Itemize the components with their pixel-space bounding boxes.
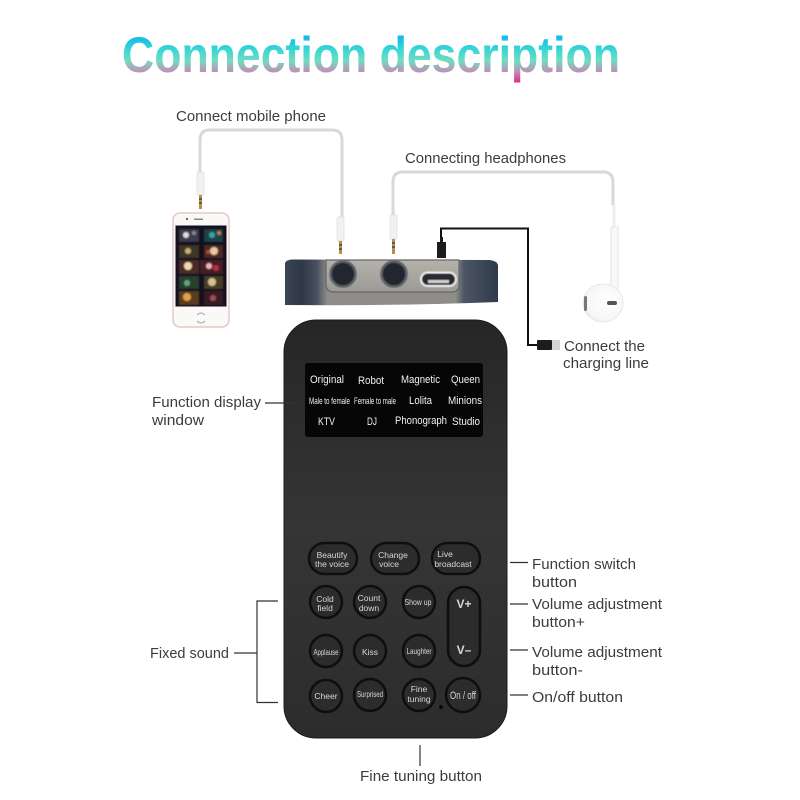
button labels: tuning	[407, 694, 431, 704]
label: function switch button	[510, 556, 636, 591]
button labels: field	[317, 603, 333, 613]
button labels: Fine	[411, 684, 428, 694]
button labels: V–	[457, 643, 472, 657]
function display window: Original	[310, 374, 344, 386]
label: volume adjustment button plus: button+	[532, 614, 585, 631]
button labels: On / off	[450, 690, 477, 702]
label: function switch button: Function switch	[532, 556, 636, 573]
function display window: Studio	[452, 416, 480, 428]
button labels: down	[359, 603, 379, 613]
label: volume adjustment button plus: Volume adjustment	[532, 596, 663, 613]
function display window: Lolita	[409, 395, 433, 407]
button labels: Cold	[316, 594, 334, 604]
label: volume adjustment button minus: button-	[532, 662, 583, 679]
button labels: broadcast	[434, 559, 472, 569]
function display window: Magnetic	[401, 374, 440, 386]
button labels: V+	[456, 597, 472, 611]
button labels: Applause	[314, 647, 339, 657]
button labels: Kiss	[362, 647, 378, 657]
button labels: Beautify	[317, 550, 348, 560]
function display window	[305, 363, 483, 437]
button labels: Surprised	[357, 689, 383, 699]
function display window: Phonograph	[395, 415, 447, 427]
cable: charging line	[437, 228, 560, 350]
title: Connection description	[122, 27, 620, 83]
function display window: Queen	[451, 374, 480, 386]
label: function display window: window	[151, 412, 204, 429]
label: fixed sound with bracket	[150, 601, 278, 702]
function display window: DJ	[367, 416, 377, 428]
button labels	[314, 549, 477, 709]
cable: phone to device	[197, 130, 344, 254]
icon: earphone	[583, 205, 623, 322]
label: fixed sound with bracket: Fixed sound	[150, 645, 229, 662]
function display window: Minions	[448, 395, 482, 407]
label: volume adjustment button minus	[510, 644, 663, 679]
label: function display window	[151, 394, 300, 429]
label: connect mobile phone: Connect mobile phone	[176, 108, 326, 125]
button labels: voice	[379, 559, 399, 569]
button labels: the voice	[315, 559, 349, 569]
button labels: Count	[358, 593, 381, 603]
buttons	[309, 543, 480, 712]
function display window: KTV	[318, 416, 336, 428]
label: connecting headphones: Connecting headphones	[405, 150, 566, 167]
function display window: Female to male	[354, 396, 396, 407]
function display window: Robot	[358, 375, 384, 387]
function display window: Male to female	[309, 396, 350, 407]
button labels: Laughter	[406, 646, 432, 656]
label: volume adjustment button minus: Volume adjustment	[532, 644, 663, 661]
device top edge	[285, 260, 498, 305]
label: function switch button: button	[532, 574, 577, 591]
label: fine tuning button: Fine tuning button	[360, 768, 482, 785]
label: connect the charging line: Connect the	[564, 338, 645, 355]
device body	[284, 320, 507, 738]
button labels: Live	[437, 549, 453, 559]
icon: smartphone	[173, 213, 229, 327]
label: function display window: Function display	[152, 394, 261, 411]
label: connect the charging line	[563, 338, 649, 372]
label: on/off button: On/off button	[532, 689, 623, 706]
button labels: Show up	[404, 597, 432, 607]
label: connect the charging line: charging line	[563, 355, 649, 372]
button labels: Change	[378, 550, 408, 560]
cable: headphones	[390, 172, 613, 254]
label: volume adjustment button plus	[510, 596, 663, 631]
button labels: Cheer	[314, 691, 338, 701]
label: fine tuning button	[360, 745, 482, 785]
